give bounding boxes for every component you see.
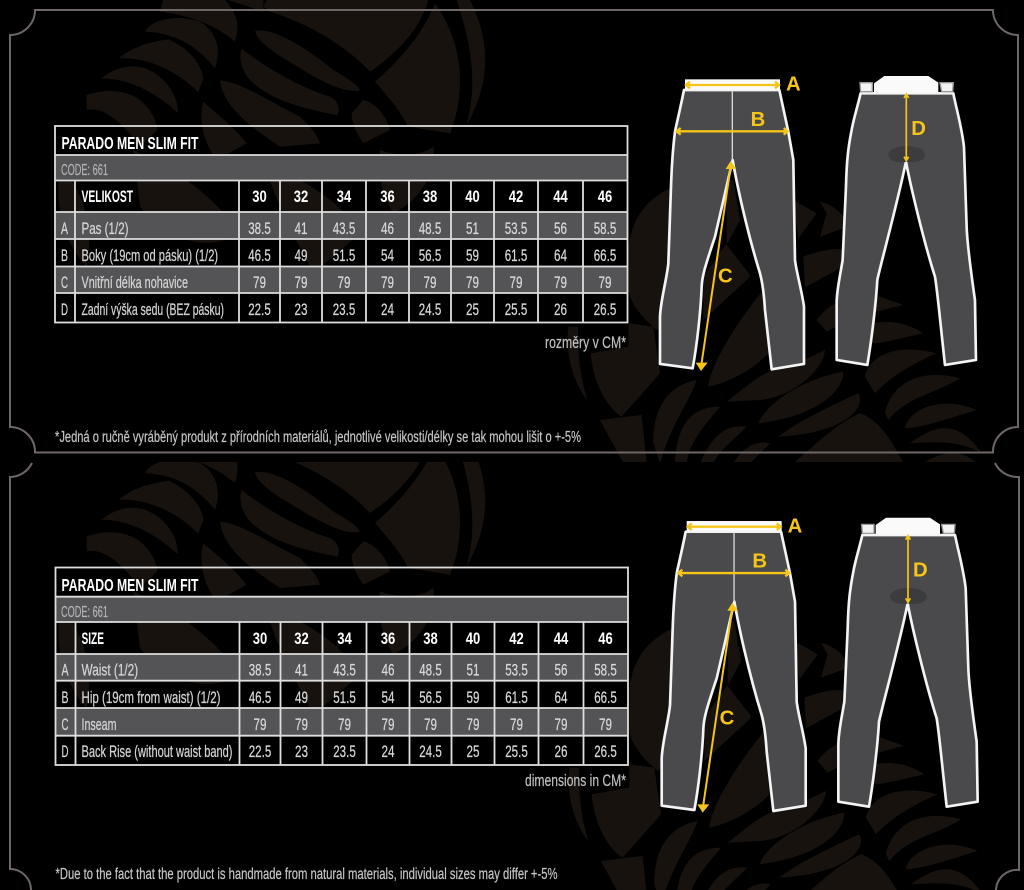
table 2 row A: 41 — [295, 660, 308, 680]
waist panel — [874, 76, 938, 93]
arrow C — [696, 161, 736, 371]
table 2 size header row: SIZE — [82, 629, 104, 648]
table 2 size header row: 40 — [466, 629, 480, 648]
table 1 size header row: 40 — [465, 187, 480, 206]
table 2 row C: 79 — [599, 715, 612, 734]
diagram: back trousers, bottom panel — [838, 518, 978, 807]
table 2 row A: 43.5 — [333, 660, 356, 680]
table 1 row D: Zadní výška sedu (BEZ pásku) — [82, 301, 224, 319]
seat shading — [890, 588, 927, 604]
table 2 row B: 66.5 — [594, 688, 617, 707]
unit note: English: dimensions in CM* — [525, 772, 626, 790]
table 1 row C: 79 — [554, 273, 567, 292]
table 2 row D: 22.5 — [249, 742, 271, 761]
table 1 row A: 58.5 — [594, 219, 616, 238]
arrow C — [697, 603, 738, 813]
table 2 size header row — [82, 629, 613, 648]
table 2 row A — [62, 660, 617, 680]
table 2 row A: 58.5 — [594, 660, 617, 680]
table 1 size header row: 38 — [423, 187, 437, 206]
table 2 row A: 46 — [382, 660, 394, 680]
table 1 row B: 51.5 — [333, 246, 355, 265]
table 1 row C: 79 — [510, 273, 522, 292]
label B: B — [752, 551, 767, 573]
table 1 row B: Boky (19cm od pásku) (1/2) — [82, 247, 218, 265]
seat shading — [888, 146, 925, 162]
table 2 row C: 79 — [510, 715, 523, 734]
table 1 row A: A — [61, 219, 68, 238]
trouser body back — [837, 93, 976, 365]
table 1 row A: 53.5 — [505, 219, 527, 238]
table 2 size header row: 36 — [381, 629, 395, 648]
table 1 row A: 56 — [554, 219, 567, 238]
table 1 grid lines — [55, 126, 628, 322]
table 2 row C: 79 — [554, 715, 568, 734]
table 1 row B: 54 — [381, 246, 394, 265]
unit note: Czech: rozměry v CM* — [545, 334, 626, 352]
waistband — [687, 521, 782, 531]
waistband — [685, 79, 780, 89]
table 2 row B: Hip (19cm from waist) (1/2) — [82, 689, 220, 707]
diagram: back trousers, top panel — [837, 76, 976, 365]
belt loop left — [860, 83, 872, 92]
belt loop right — [940, 83, 953, 92]
table 2 row B: 49 — [295, 688, 308, 707]
table 2 row D: 25 — [466, 742, 480, 761]
arrow A — [686, 82, 779, 88]
table 2 row D: 25.5 — [505, 742, 528, 761]
table 1 row C: 79 — [466, 273, 479, 292]
table 2 row C: 79 — [382, 715, 394, 734]
table 2 row D: 24.5 — [419, 742, 442, 761]
fly seam — [730, 91, 734, 159]
table 2 row C: Inseam — [82, 716, 116, 734]
table 2 row D: 23 — [295, 742, 308, 761]
waist panel — [876, 518, 940, 534]
table 2 row D: 26 — [554, 742, 568, 761]
table 2 size header row: 42 — [509, 629, 524, 648]
table 2 row A: A — [62, 660, 69, 680]
table 1 row B: 59 — [466, 246, 479, 265]
table 2 grey rows — [56, 597, 628, 736]
table 1 row C: 79 — [294, 273, 308, 292]
arrow D — [906, 536, 910, 602]
table 2 row D: D — [62, 742, 68, 761]
table 2 row C: 79 — [466, 715, 480, 734]
footnote: English: *Due to the fact that the product is handmade from natural materials, individual sizes may differ +-5% — [56, 866, 558, 883]
table 1 size header row: 30 — [252, 187, 267, 206]
table 2 row A: 48.5 — [419, 660, 442, 680]
table 2 row B: 56.5 — [419, 688, 442, 707]
label D: D — [911, 118, 926, 140]
belt loop right — [942, 524, 955, 533]
table 2 row B: 61.5 — [505, 688, 528, 707]
table 2 row C: 79 — [295, 715, 308, 734]
diagram: front trousers, top panel — [660, 74, 804, 371]
table 2 title: PARADO MEN SLIM FIT — [62, 575, 199, 595]
table 1 row A: Pas (1/2) — [82, 220, 128, 238]
table 2 product code: CODE: 661 — [61, 604, 108, 621]
table 1 row D: 22.5 — [248, 300, 271, 319]
table 1 row B — [61, 246, 616, 265]
table 2 row D: 26.5 — [594, 742, 617, 761]
decorative emblem: top panel lower right — [568, 180, 982, 463]
table 1 title: PARADO MEN SLIM FIT — [62, 133, 199, 153]
table 1 row A: 46 — [381, 219, 394, 238]
decorative emblem: top panel upper left — [58, 0, 485, 273]
table 2 size header row: 34 — [337, 629, 352, 648]
frame: top panel — [10, 10, 1018, 452]
table 1 size header row: 34 — [337, 187, 352, 206]
table 1 row D: 26 — [554, 300, 567, 319]
trouser body front — [660, 90, 804, 369]
footnote: Czech: *Jedná o ručně vyráběný produkt z přírodních materiálů, jednotlivé velikosti/délky se tak mohou lišit o +-5% — [55, 429, 581, 446]
table 2 row A: 56 — [554, 660, 568, 680]
table 2 row C: 79 — [424, 715, 437, 734]
panel: Czech size table — [55, 126, 628, 322]
label C: C — [720, 707, 735, 729]
decorative emblem: bottom panel upper left — [58, 462, 486, 707]
arrow B — [677, 128, 788, 135]
table 1 row C: C — [61, 273, 68, 292]
table 1 row B: 64 — [554, 246, 567, 265]
table 2 row D: Back Rise (without waist band) — [82, 743, 232, 761]
frame: bottom panel — [10, 463, 1019, 890]
label B: B — [751, 109, 765, 131]
table 1 size header row — [82, 187, 612, 206]
table 1 size header row: 44 — [553, 187, 568, 206]
table 1 row A — [61, 219, 616, 238]
table 1 row B: 56.5 — [419, 246, 441, 265]
label A: A — [786, 74, 801, 96]
table 1 row C: 79 — [338, 273, 350, 292]
table 1 row D: 23 — [294, 300, 308, 319]
table 1 row D: 23.5 — [333, 300, 355, 319]
diagram: front trousers, bottom panel — [662, 515, 806, 813]
arrow B — [678, 570, 789, 576]
table 2 row B: 46.5 — [249, 688, 271, 707]
table 2 row A: 51 — [466, 660, 480, 680]
table 2 size header row: 30 — [253, 629, 267, 648]
belt loop left — [862, 524, 874, 533]
table 1 size header row: 46 — [598, 187, 612, 206]
arrow A — [688, 523, 781, 530]
table 2 row A: 53.5 — [505, 660, 528, 680]
table 2 size header row: 44 — [554, 629, 569, 648]
decorative emblem: bottom panel lower right — [569, 621, 983, 890]
table 2 row A: 38.5 — [249, 660, 271, 680]
table 2 size header row: 38 — [423, 629, 438, 648]
table 2 row D — [62, 742, 617, 761]
table 2 row C: 79 — [338, 715, 351, 734]
table 1 size header row: 32 — [294, 187, 308, 206]
table 1 row C: Vnitřní délka nohavice — [82, 274, 188, 292]
table 2 row B — [62, 688, 617, 707]
table 1 row D: 25.5 — [505, 300, 527, 319]
label A: A — [788, 515, 803, 537]
table 1 row C: 79 — [424, 273, 436, 292]
table 2 row B: 51.5 — [333, 688, 356, 707]
table 2 grid lines — [56, 568, 628, 765]
table 2 row C: 79 — [254, 715, 266, 734]
table 2 row B: 59 — [466, 688, 480, 707]
table 1 row B: 66.5 — [594, 246, 616, 265]
table 1 size header row: VELIKOST — [82, 187, 133, 206]
table 1 row B: 61.5 — [505, 246, 527, 265]
table 1 size header row: 36 — [380, 187, 395, 206]
table 1 row A: 48.5 — [419, 219, 441, 238]
table 1 grey rows — [55, 155, 628, 294]
table 1 row D: 24 — [381, 300, 394, 319]
table 1 row A: 51 — [466, 219, 479, 238]
table 1 row C — [61, 273, 612, 292]
table 1 row D: D — [61, 300, 68, 319]
table 1 row D: 24.5 — [419, 300, 441, 319]
table 1 row C: 79 — [253, 273, 266, 292]
table 2 row B: 54 — [382, 688, 394, 707]
fly seam — [732, 532, 736, 601]
trouser body front — [662, 532, 806, 811]
table 1 size header row: 42 — [509, 187, 523, 206]
label C: C — [718, 266, 733, 288]
table 1 row B: 46.5 — [248, 246, 271, 265]
table 2 row D: 23.5 — [333, 742, 356, 761]
table 1 row A: 43.5 — [333, 219, 355, 238]
table 1 row A: 41 — [294, 219, 308, 238]
label D: D — [913, 560, 928, 582]
table 2 row B: B — [62, 688, 68, 707]
table 1 row D: 26.5 — [594, 300, 616, 319]
table 1 product code: CODE: 661 — [61, 162, 108, 179]
table 2 row C: C — [62, 715, 68, 734]
table 2 row D: 24 — [382, 742, 394, 761]
panel: English size table — [56, 568, 628, 765]
table 1 row D: 25 — [466, 300, 479, 319]
table 1 row C: 79 — [381, 273, 394, 292]
arrow D — [904, 94, 909, 161]
table 1 row D — [61, 300, 616, 319]
table 1 row B: B — [61, 246, 68, 265]
table 2 row B: 64 — [554, 688, 568, 707]
trouser body back — [838, 535, 978, 807]
table 2 size header row: 46 — [598, 629, 613, 648]
table 2 size header row: 32 — [294, 629, 309, 648]
table 1 row C: 79 — [598, 273, 612, 292]
table 2 row C — [62, 715, 612, 734]
table 1 row B: 49 — [294, 246, 308, 265]
table 2 row A: Waist (1/2) — [82, 662, 138, 680]
table 1 row A: 38.5 — [248, 219, 271, 238]
